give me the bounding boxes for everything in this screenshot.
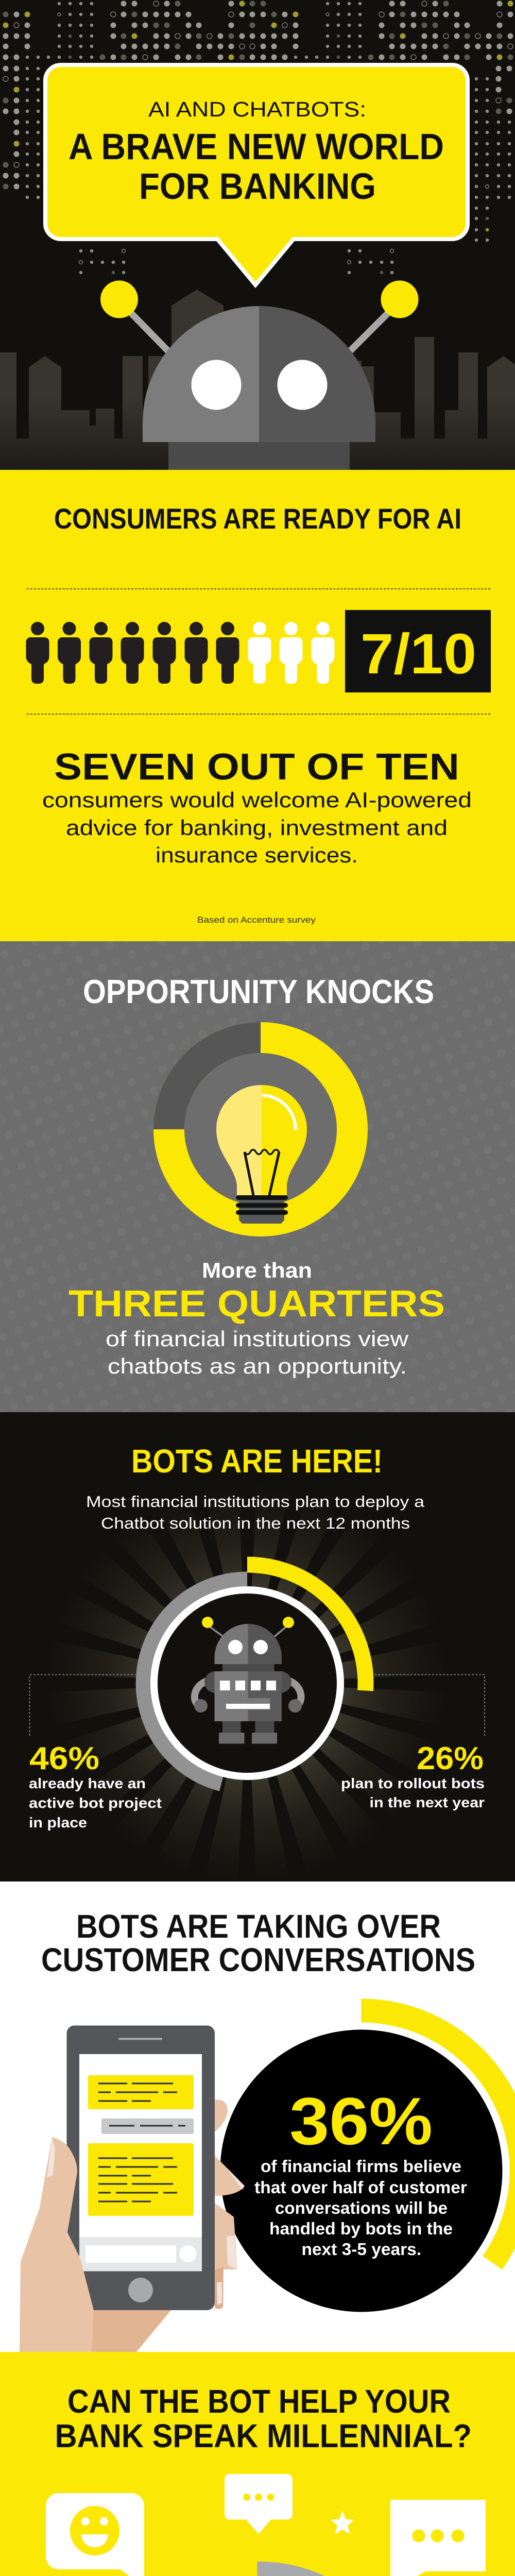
title text: AI AND CHATBOTS: xyxy=(148,97,366,121)
city skyline xyxy=(0,290,515,470)
stat: 46 percent: active bot project xyxy=(29,1795,162,1811)
stat circle: 36 percent: handled by bots in the xyxy=(269,2219,453,2238)
icon: large chat bubble xyxy=(390,2500,486,2576)
stat: 26 percent: plan to rollout bots xyxy=(341,1775,485,1791)
title text: A BRAVE NEW WORLD xyxy=(68,127,444,167)
heading: BOTS ARE TAKING OVER xyxy=(76,1908,441,1945)
seven out of ten statement: SEVEN OUT OF TEN xyxy=(54,747,459,788)
icon: smiley speech bubble xyxy=(46,2493,144,2576)
heading: BANK SPEAK MILLENNIAL? xyxy=(55,2417,472,2454)
stat circle: 36 percent: next 3-5 years. xyxy=(302,2240,421,2259)
section: opportunity knocks xyxy=(0,941,515,1412)
stat: 26 percent: in the next year xyxy=(370,1794,485,1810)
phone xyxy=(67,2026,215,2310)
intro text xyxy=(86,1493,425,1532)
stat circle: 36 percent: that over half of customer xyxy=(254,2178,467,2197)
title speech bubble xyxy=(45,65,468,285)
dot matrix background xyxy=(3,1,515,273)
stat: 46 percent: already have an xyxy=(29,1775,146,1791)
heading: BOTS ARE HERE! xyxy=(131,1443,383,1480)
icon: hand holding phone xyxy=(20,2026,245,2352)
source note: Based on Accenture survey xyxy=(197,915,316,925)
stat: 46 percent: in place xyxy=(29,1815,87,1831)
seven out of ten statement: consumers would welcome AI-powered xyxy=(42,788,472,812)
three quarters statement: chatbots as an opportunity. xyxy=(108,1354,407,1378)
stat circle: 36 percent: of financial firms believe xyxy=(261,2157,461,2176)
7/10 callout: 7/10 xyxy=(360,622,476,686)
intro text: Most financial institutions plan to deploy a xyxy=(86,1493,425,1511)
ring chart: 86 percent xyxy=(113,2571,405,2576)
title text: FOR BANKING xyxy=(139,166,376,207)
stat circle: 36 percent: 36% xyxy=(289,2083,433,2159)
section: can the bot help your bank speak millennial xyxy=(0,2352,515,2576)
stat circle: 36 percent: conversations will be xyxy=(275,2198,448,2217)
title text xyxy=(68,97,444,207)
section: header with robot and title xyxy=(0,0,515,470)
section: consumers are ready for AI xyxy=(0,470,515,941)
three quarters statement: of financial institutions view xyxy=(106,1327,409,1351)
icon: light bulb xyxy=(216,1085,307,1224)
icon: star xyxy=(331,2511,354,2534)
stat: 26 percent: 26% xyxy=(417,1741,484,1776)
7/10 callout xyxy=(345,610,491,692)
heading: CONSUMERS ARE READY FOR AI xyxy=(54,502,461,535)
heading: OPPORTUNITY KNOCKS xyxy=(83,973,434,1010)
section: bots are here xyxy=(0,1412,515,1910)
stat: 46 percent xyxy=(29,1741,162,1831)
donut chart: three quarters xyxy=(169,1038,352,1221)
stat circle: 36 percent xyxy=(220,2010,515,2312)
seven out of ten statement: advice for banking, investment and xyxy=(66,816,448,840)
robot antennas xyxy=(100,280,418,352)
section: bots are taking over customer conversations xyxy=(0,1882,515,2352)
three quarters statement: More than xyxy=(202,1258,312,1282)
heading: CAN THE BOT HELP YOUR xyxy=(67,2383,451,2420)
robot head xyxy=(143,306,375,470)
three quarters statement: THREE QUARTERS xyxy=(68,1283,445,1325)
stat: 26 percent xyxy=(341,1741,485,1810)
heading xyxy=(55,2383,472,2454)
heading: CUSTOMER CONVERSATIONS xyxy=(41,1941,475,1978)
intro text: Chatbot solution in the next 12 months xyxy=(101,1514,410,1532)
stat: 46 percent: 46% xyxy=(29,1741,99,1776)
pictogram: seven of ten people xyxy=(26,622,335,684)
icon: small chat bubble xyxy=(225,2474,293,2534)
seven out of ten statement xyxy=(42,747,472,867)
ring chart: 46% and 26% xyxy=(143,1565,366,1784)
three quarters statement xyxy=(68,1258,445,1378)
seven out of ten statement: insurance services. xyxy=(156,843,358,867)
heading xyxy=(41,1908,475,1978)
icon: robot xyxy=(194,1617,302,1743)
sunburst xyxy=(79,1515,415,1851)
